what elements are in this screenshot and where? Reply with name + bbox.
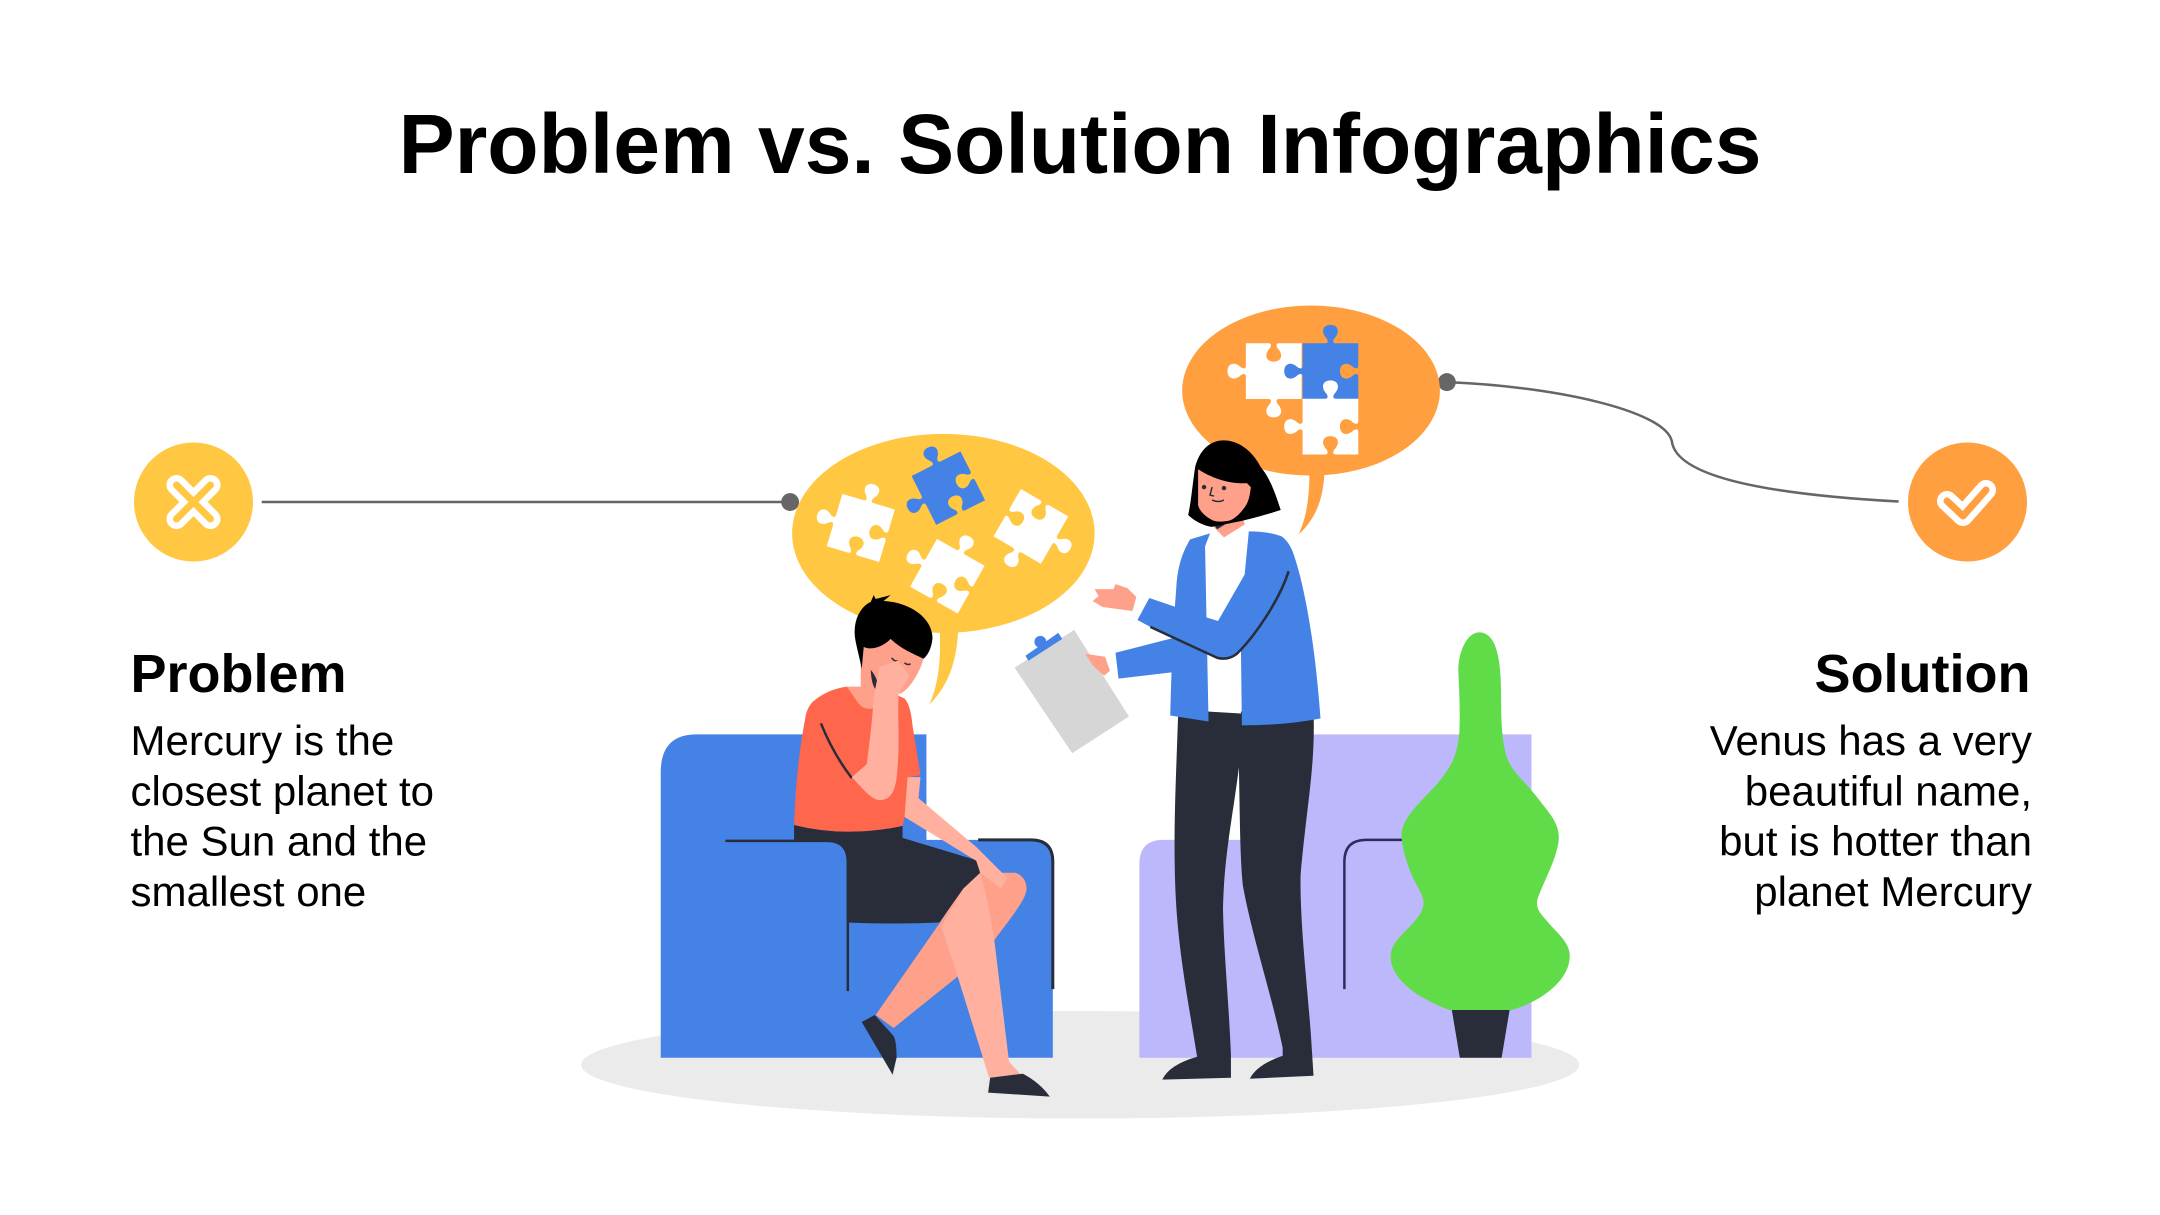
icon: solution check xyxy=(1908,442,2027,562)
eyes and mouth xyxy=(1202,485,1226,502)
title: Problem vs. Solution Infographics xyxy=(399,97,1761,191)
trousers xyxy=(1162,711,1314,1080)
raised arm outline xyxy=(1150,571,1289,659)
standing person xyxy=(1015,440,1320,1080)
puzzle piece: white bottom right xyxy=(1284,380,1358,454)
skirt xyxy=(794,825,980,923)
hand holding clipboard xyxy=(1085,654,1110,676)
plant foliage xyxy=(1391,632,1570,1011)
problem text block: the Sun and the xyxy=(130,818,427,865)
illustration scene xyxy=(581,305,1579,1118)
puzzle piece: blue top xyxy=(887,435,985,533)
blue sofa xyxy=(661,734,1053,1058)
reaching hand xyxy=(1093,584,1136,611)
plant pot xyxy=(1452,1010,1510,1058)
shirt xyxy=(794,687,920,832)
problem text block: smallest one xyxy=(130,868,366,915)
jacket left panel xyxy=(1170,533,1210,721)
solution text block xyxy=(1710,644,2032,915)
connector: problem icon to yellow bubble xyxy=(262,493,799,511)
ground shadow xyxy=(581,1011,1579,1118)
neck shadow xyxy=(1212,518,1235,529)
connector: orange bubble to solution icon xyxy=(1438,373,1899,502)
neck and collar xyxy=(847,664,891,709)
shirt fold line xyxy=(821,723,852,778)
neck xyxy=(1214,509,1245,537)
front leg xyxy=(941,873,1021,1078)
back leg xyxy=(876,873,1027,1028)
back shoe xyxy=(862,1015,897,1075)
problem text block xyxy=(130,644,434,915)
arm to knee xyxy=(905,777,1007,889)
jaw shadow xyxy=(871,670,878,691)
hair xyxy=(855,595,932,669)
jacket right panel xyxy=(1241,531,1320,725)
problem text block: Problem xyxy=(130,644,347,704)
solution text block: planet Mercury xyxy=(1754,868,2032,915)
yellow speech bubble xyxy=(792,434,1095,705)
solution text block: Solution xyxy=(1815,644,2030,704)
face xyxy=(862,639,923,694)
solution text block: beautiful name, xyxy=(1745,767,2032,814)
closed eyes xyxy=(892,658,911,665)
puzzle piece: blue top right xyxy=(1284,325,1358,399)
lilac sofa xyxy=(1139,734,1531,1058)
front shoe xyxy=(988,1074,1050,1097)
problem text block: closest planet to xyxy=(130,767,434,814)
solution text block: but is hotter than xyxy=(1719,818,2032,865)
face xyxy=(1198,469,1251,522)
puzzle piece: white left xyxy=(809,471,900,562)
icon: problem cross xyxy=(134,442,253,562)
seated person xyxy=(794,595,1050,1097)
orange speech bubble xyxy=(1182,305,1440,534)
arm holding clipboard xyxy=(1116,635,1185,679)
raised arm xyxy=(1137,559,1289,659)
puzzle piece: white right xyxy=(985,489,1084,588)
clipboard xyxy=(1015,630,1129,753)
puzzle piece: white bottom xyxy=(894,514,993,613)
problem text block: Mercury is the xyxy=(130,717,394,764)
plant xyxy=(1391,632,1570,1058)
solution text block: Venus has a very xyxy=(1710,717,2032,764)
shirt xyxy=(1205,524,1248,713)
hair xyxy=(1188,440,1281,527)
puzzle piece: white top left xyxy=(1227,343,1302,417)
arm propping face xyxy=(852,661,910,800)
